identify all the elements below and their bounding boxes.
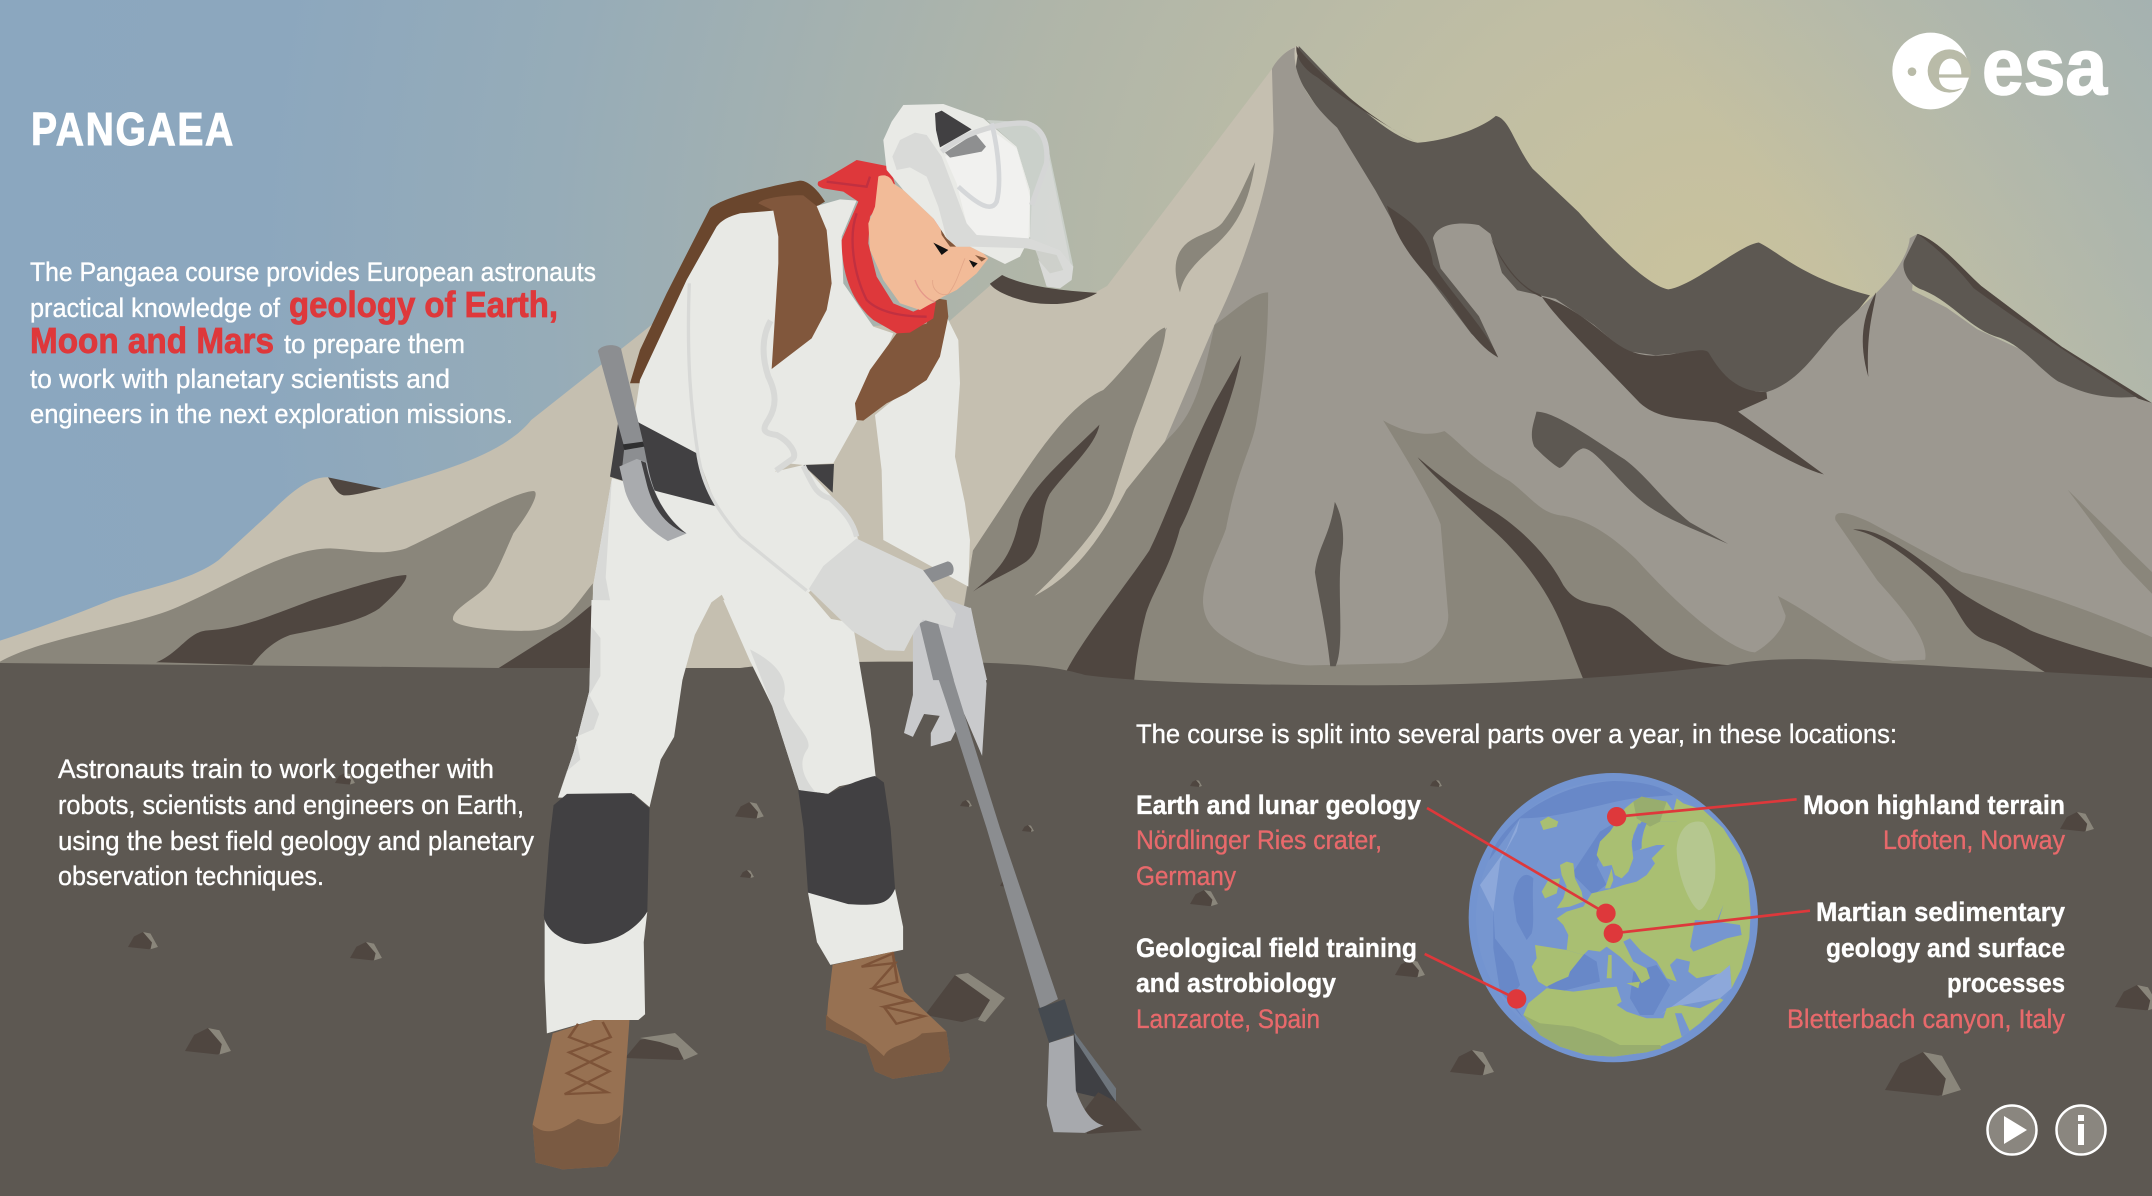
knee pad back (798, 776, 895, 905)
dark ocean atlantic (1513, 875, 1533, 940)
dark foot of slope (496, 603, 594, 673)
hoe collar (1038, 999, 1075, 1043)
helmet inner white (945, 127, 1030, 240)
highlighted moon and mars: Moon and Mars (30, 320, 274, 361)
Black Sea (1690, 905, 1742, 952)
shadow streak under visor (990, 275, 1097, 304)
hammer band (623, 442, 644, 450)
Sahara tone (1523, 1015, 1662, 1057)
label: Earth and lunar geology: Germany (1136, 861, 1236, 891)
rear glove fingers (904, 608, 987, 756)
mid grey lower slopes (950, 292, 2152, 698)
esa logo (1892, 22, 2107, 111)
Denmark (1605, 868, 1613, 888)
label: Geological field training: Lanzarote, Spain (1136, 1004, 1320, 1034)
front leg (558, 600, 710, 807)
logo e lower (1939, 78, 1969, 90)
brows (940, 225, 986, 262)
marker lofoten (1607, 807, 1626, 826)
hoe edge (1074, 1031, 1116, 1102)
sleeve seam (688, 283, 807, 591)
lower trouser back (808, 889, 903, 965)
Gulf of Bothnia (1632, 822, 1647, 852)
marker ries (1596, 904, 1616, 923)
robots paragraph: robots, scientists and engineers on Earth, (58, 790, 524, 820)
beige face on left (1034, 69, 1274, 596)
grey blob on the pass slope (1532, 412, 1728, 544)
dark patch near the pass (1387, 206, 1498, 357)
hand and grip (809, 538, 956, 680)
laces front (565, 1022, 611, 1094)
robots paragraph (58, 754, 534, 891)
label: Earth and lunar geology (1136, 790, 1421, 891)
locations intro: The course is split into several parts over a year, in these locations: (1136, 719, 1897, 749)
logo dot (1908, 67, 1916, 76)
label: Martian sedimentary (1787, 897, 2065, 1034)
dark streak left (973, 425, 1099, 592)
helmet shell (883, 104, 1030, 264)
intro paragraph: to prepare them (284, 329, 465, 359)
play button (1988, 1106, 2036, 1154)
dark streak centre (1418, 457, 1730, 683)
hoe back (1074, 1031, 1116, 1102)
logo e stroke (1928, 49, 1971, 93)
torso (633, 199, 893, 465)
robots paragraph: Astronauts train to work together with (58, 754, 494, 784)
scattered rocks (128, 773, 2152, 1096)
astronaut figure (533, 104, 1142, 1169)
rock edge near boot (955, 973, 1005, 1022)
Corsica and Sardinia (1607, 955, 1612, 978)
hammer pick edge (641, 461, 687, 533)
intro paragraph: The Pangaea course provides European astronauts (30, 257, 596, 287)
logo wordmark: esa (1982, 22, 2107, 111)
deep shadow on the pass (1490, 238, 1824, 475)
dark streak centre left (1065, 355, 1241, 683)
intro paragraph: practical knowledge of (30, 293, 280, 323)
front leg shading (558, 627, 600, 798)
hammer on belt (598, 345, 687, 541)
Sicily (1627, 982, 1640, 988)
belt (610, 410, 715, 507)
Ireland (1542, 878, 1560, 898)
beige back ridge (0, 287, 700, 687)
logo e counter (1939, 59, 1961, 74)
dark slope streak (156, 575, 406, 665)
visor lower strip (1030, 153, 1072, 287)
pelvis and thighs (590, 478, 861, 680)
intro paragraph (30, 257, 596, 429)
marker lanzarote (1507, 989, 1526, 1009)
smile (915, 280, 935, 302)
title: PANGAEA (31, 104, 233, 156)
label: Martian sedimentary: Martian sedimentary (1816, 897, 2065, 927)
label: Earth and lunar geology: Nördlinger Ries crater, (1136, 825, 1382, 855)
Scandinavia (1597, 797, 1678, 878)
inner strap (958, 123, 999, 207)
top ridge shadow (1296, 46, 1418, 143)
land highlight (1677, 821, 1715, 910)
front glove (809, 538, 956, 651)
rear glove palm (914, 597, 987, 680)
highlighted geology: geology of Earth, (289, 284, 558, 325)
label: Geological field training (1136, 933, 1417, 1034)
dark back range (1295, 46, 1870, 464)
hammer handle (598, 345, 647, 467)
dark ocean west (1493, 908, 1523, 1018)
label: Earth and lunar geology: Earth and lunar geology (1136, 790, 1421, 820)
robots paragraph: using the best field geology and planetary (58, 826, 534, 856)
dark med west (1547, 953, 1600, 993)
astronaut lower body (533, 600, 1142, 1169)
back leg (723, 600, 876, 794)
sleeve fold (764, 321, 794, 471)
Africa (1523, 987, 1723, 1057)
intro paragraph: engineers in the next exploration missions. (30, 399, 513, 429)
globe (1425, 773, 1810, 1062)
label: Geological field training: Geological field training (1136, 933, 1417, 963)
label: Moon highland terrain: Lofoten, Norway (1883, 825, 2065, 855)
pointer earth and lunar (1427, 808, 1606, 913)
boot front (533, 1020, 629, 1169)
mid grey slope (0, 491, 593, 687)
label: Martian sedimentary: Bletterbach canyon, Italy (1787, 1004, 2065, 1034)
pointer martian (1613, 911, 1810, 933)
Iceland (1540, 817, 1558, 830)
cuff fold (803, 466, 857, 537)
flat rock edge (640, 1033, 698, 1060)
beige ridge behind the astronaut (643, 46, 1300, 681)
marker bletterbach (1604, 924, 1623, 943)
logo emblem (1892, 33, 1971, 109)
scarf folds (827, 177, 927, 317)
Eurasia (1557, 798, 1751, 988)
sole front (533, 1115, 621, 1169)
Lapland tone (1633, 797, 1667, 827)
robots paragraph: observation techniques. (58, 861, 324, 891)
Iberia (1532, 945, 1583, 987)
eye right (969, 260, 978, 268)
thighs (590, 478, 861, 680)
intro paragraph: to work with planetary scientists and (30, 364, 450, 394)
small dark ridge shadow (328, 477, 382, 495)
narrow slit on right peak (1863, 292, 1876, 377)
lower trouser front (545, 912, 647, 1033)
nose line (933, 258, 965, 295)
knee pad front (544, 793, 650, 944)
eye left (933, 243, 948, 255)
Red Sea (1675, 1013, 1690, 1037)
globe rim (1469, 773, 1758, 1062)
hammer pick (619, 459, 687, 541)
thigh shading (590, 478, 614, 680)
label: Moon highland terrain (1803, 790, 2065, 855)
right-side stripe (2068, 490, 2152, 594)
rear arm (875, 317, 970, 587)
dark vent (935, 111, 972, 147)
label: Geological field training: and astrobiology (1136, 968, 1336, 998)
inner ocean (1476, 780, 1751, 1055)
neck and scarf (818, 160, 942, 333)
sole back (826, 1014, 950, 1079)
head and helmet (868, 104, 1073, 310)
helmet band (892, 133, 1073, 288)
dark ocean north sea (1573, 822, 1617, 895)
grey slash on beige (1176, 162, 1255, 292)
slim central slit (1315, 502, 1343, 666)
label: Martian sedimentary: geology and surface (1826, 933, 2065, 963)
main grey mountain body (950, 47, 2152, 689)
dark med east (1630, 965, 1670, 1015)
pale ocean left (1480, 818, 1520, 912)
sky top right tint (1000, 0, 2152, 700)
pale ocean right (1660, 965, 1732, 1015)
visor glass (987, 120, 1073, 267)
pointer lanzarote (1425, 954, 1517, 999)
belt right side (803, 464, 834, 493)
pack dark strap (630, 181, 825, 383)
backpack strap front (758, 195, 832, 369)
info button (2056, 1106, 2106, 1154)
boot back (826, 952, 950, 1079)
back leg shading (750, 649, 817, 794)
laces back (862, 953, 924, 1024)
front sleeve (687, 283, 858, 593)
shoulder strap (855, 298, 948, 421)
ground (0, 659, 2152, 1196)
visor rim (942, 123, 1047, 205)
sleeve and straps front (687, 195, 948, 593)
label: Moon highland terrain: Moon highland terrain (1803, 790, 2065, 820)
hoe rock (1085, 1092, 1142, 1134)
dark ocean top band (1489, 781, 1673, 860)
large rock near boot (925, 975, 1000, 1022)
face (868, 175, 988, 310)
upper right cap of right peak (1903, 234, 2138, 397)
grey lens (945, 133, 986, 158)
torso and straps (610, 181, 893, 507)
left background mountains (0, 287, 700, 687)
logo disc (1892, 33, 1969, 109)
pointer moon highland (1617, 799, 1797, 817)
ridge darker edge right peak (1917, 234, 2152, 403)
pole (920, 621, 1058, 1009)
label: Martian sedimentary: processes (1947, 968, 2065, 998)
Britain (1557, 862, 1583, 908)
hand tool grip (919, 561, 954, 587)
dark streak right (1853, 529, 2152, 681)
hoe blade (1047, 1035, 1104, 1133)
central mountains (643, 46, 2152, 698)
pole upper (919, 616, 954, 680)
red scarf (818, 160, 942, 333)
flat rock near left boot (625, 1033, 695, 1060)
